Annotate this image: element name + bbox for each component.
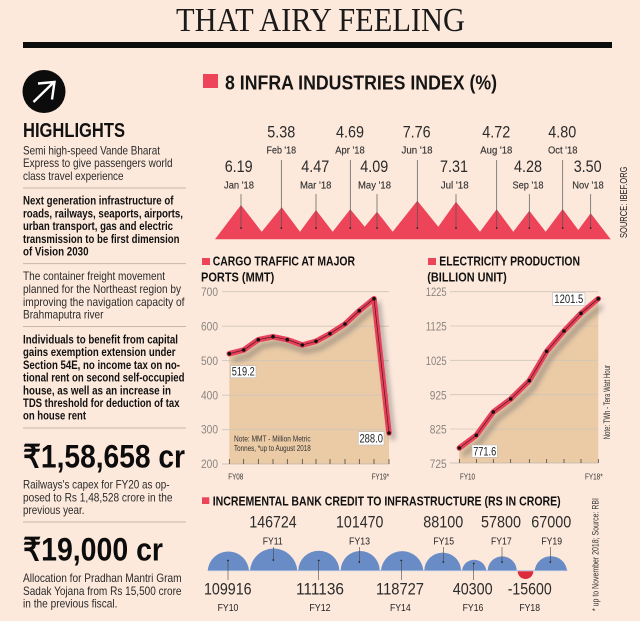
upper values: 67000 — [531, 513, 571, 531]
line shadow — [463, 306, 602, 455]
upper values: 57800 — [481, 513, 521, 531]
y axis labels: 725 — [430, 457, 447, 471]
values: 7.31 — [440, 158, 468, 176]
data points — [228, 297, 391, 435]
upper values: 88100 — [423, 513, 463, 531]
month labels: May '18 — [358, 180, 391, 192]
chart note — [234, 434, 311, 453]
text block: capital gains — [23, 332, 184, 423]
lower values: 40300 — [453, 580, 493, 598]
text block: Vision 2030: roads, railways, seaports, airports, — [23, 206, 183, 220]
text block: capital gains: TDS threshold for deduction of tax — [23, 396, 180, 410]
heading: cargo traffic: PORTS (MMT) — [201, 270, 274, 285]
y axis labels: 300 — [201, 423, 218, 437]
grid lines — [222, 292, 389, 464]
chart: triangles — [215, 201, 611, 239]
y axis labels: 700 — [201, 285, 218, 299]
values: 4.47 — [301, 158, 329, 176]
area fill — [459, 299, 598, 463]
values: 4.28 — [514, 158, 542, 176]
value label 771.6: 771.6 — [473, 446, 496, 458]
text block: capital gains: Individuals to benefit from capital — [23, 332, 178, 346]
lower year labels — [218, 602, 540, 614]
text block: container freight — [23, 269, 185, 322]
heading: electricity: (BILLION UNIT) — [427, 270, 507, 285]
source note: SOURCE: IBEF.ORG — [618, 166, 630, 238]
title: THAT AIRY FEELING — [176, 2, 465, 39]
text block: capital gains: Section 54E, no income tax on no- — [23, 358, 180, 372]
value label 288.0: 288.0 — [359, 433, 383, 445]
heading: bank credit: INCREMENTAL BANK CREDIT TO INFRASTRUCTURE (RS IN CRORE) — [213, 495, 561, 509]
text block: Vision 2030: Next generation infrastructure of — [23, 194, 174, 208]
data points — [458, 297, 600, 450]
panel: cargo traffic chart — [201, 254, 393, 481]
month labels: Jan '18 — [224, 180, 254, 192]
values: 4.69 — [336, 123, 364, 141]
text block: container freight: improving the navigation capacity of — [23, 295, 185, 309]
lower values: 111136 — [296, 580, 344, 598]
y axis labels: 500 — [201, 354, 218, 368]
icon: arrow in circle — [22, 70, 66, 113]
y axis labels: 200 — [201, 457, 218, 471]
text block: Vande Bharat — [23, 143, 172, 183]
lower values: 109916 — [204, 580, 252, 598]
y axis labels: 1025 — [426, 354, 447, 368]
y axis labels: 400 — [201, 389, 218, 403]
text block: Vande Bharat: Express to give passengers world — [23, 156, 172, 170]
upper year labels: FY15 — [433, 535, 454, 547]
text block: Vande Bharat: Semi high-speed Vande Bharat — [23, 143, 161, 157]
heading: infra index: 8 INFRA INDUSTRIES INDEX (%) — [225, 72, 497, 94]
heading: cargo traffic: CARGO TRAFFIC AT MAJOR — [213, 254, 355, 269]
values: 4.80 — [548, 123, 576, 141]
text block: railways capex: Railways's capex for FY20 as op- — [23, 477, 170, 491]
month labels: Feb '18 — [267, 144, 296, 156]
chart: semicircles — [208, 549, 567, 571]
y axis labels: 1125 — [426, 319, 447, 333]
text block: container freight: The container freight movement — [23, 269, 166, 283]
month labels: Sep '18 — [512, 180, 544, 192]
line shadow — [233, 305, 393, 440]
x axis labels: FY19* — [372, 471, 390, 481]
x axis labels — [460, 471, 603, 481]
text block: railways capex: previous year. — [23, 503, 84, 517]
text block: gram sadak: in the previous fiscal. — [23, 596, 118, 610]
lower values: -15600 — [508, 580, 552, 598]
upper values — [249, 513, 571, 531]
y axis labels: 1225 — [426, 285, 447, 299]
upper year labels — [263, 535, 562, 547]
text block: capital gains: tional rent on second self-occupied — [23, 371, 184, 385]
text block: Vision 2030: urban transport, gas and electric — [23, 219, 173, 233]
values: 3.50 — [574, 158, 602, 176]
month labels: Mar '18 — [300, 180, 332, 192]
chart note: Note: MMT - Million Metric — [234, 434, 311, 444]
upper year labels: FY19 — [541, 535, 562, 547]
lower values: 118727 — [376, 580, 424, 598]
y axis labels — [201, 285, 218, 471]
month labels: Nov '18 — [572, 180, 604, 192]
y axis labels: 925 — [430, 389, 447, 403]
values: 4.09 — [360, 158, 388, 176]
text block: capital gains: on house rent — [23, 409, 86, 423]
text block: gram sadak — [23, 571, 182, 610]
stems — [241, 160, 591, 228]
panel: incremental bank credit — [202, 495, 601, 614]
note: TWh: Note: TWh - Tera Watt Hour — [602, 365, 612, 439]
month labels — [224, 144, 604, 192]
text block: Vision 2030: of Vision 2030 — [23, 244, 89, 258]
text block: gram sadak: Allocation for Pradhan Mantri Gram — [23, 571, 182, 585]
text block: Vision 2030: transmission to be first dimension — [23, 232, 180, 246]
heading: electricity: ELECTRICITY PRODUCTION — [439, 254, 580, 269]
stems — [228, 547, 550, 580]
lower year labels: FY14 — [390, 602, 411, 614]
upper year labels: FY11 — [263, 535, 283, 547]
x axis labels: FY18* — [585, 471, 603, 481]
month labels: Aug '18 — [480, 144, 512, 156]
upper year labels: FY13 — [349, 535, 370, 547]
chart note: Tonnes, *up to August 2018 — [234, 443, 311, 453]
negative arc FY18 — [518, 571, 533, 579]
values: 5.38 — [267, 123, 295, 141]
title — [23, 2, 612, 48]
heading: electricity — [427, 254, 580, 285]
x axis labels: FY08 — [228, 471, 243, 481]
x axis labels: FY10 — [460, 471, 475, 481]
text block: gram sadak: Sadak Yojana from Rs 15,500 crore — [23, 584, 182, 598]
text block: container freight: Brahmaputra river — [23, 308, 104, 322]
month labels: Jun '18 — [402, 144, 433, 156]
month labels: Jul '18 — [441, 180, 469, 192]
month labels: Oct '18 — [548, 144, 578, 156]
upper values: 146724 — [249, 513, 297, 531]
upper values: 101470 — [336, 513, 383, 531]
area fill — [229, 299, 389, 464]
heading: cargo traffic — [201, 254, 355, 285]
grid lines — [450, 292, 598, 463]
heading: highlights: HIGHLIGHTS — [23, 119, 125, 142]
values: 7.76 — [403, 123, 431, 141]
line — [459, 299, 598, 448]
lower year labels: FY10 — [218, 602, 238, 614]
value label 1201.5: 1201.5 — [554, 294, 583, 306]
lower year labels: FY16 — [463, 602, 483, 614]
text block: Vande Bharat: class travel experience — [23, 169, 124, 183]
lower values — [204, 580, 552, 598]
source note: RBI: * up to November 2018; Source: RBI — [590, 498, 601, 611]
lower year labels: FY12 — [309, 602, 331, 614]
baseline — [208, 569, 568, 572]
upper year labels: FY17 — [491, 535, 512, 547]
lower year labels: FY18 — [519, 602, 540, 614]
ticks — [229, 459, 389, 464]
panel: electricity production chart — [426, 254, 612, 481]
text block: container freight: planned for the Northeast region by — [23, 282, 181, 296]
text block: railways capex — [23, 477, 173, 517]
big number: railways capex: ₹1,58,658 cr — [23, 438, 185, 474]
values: 6.19 — [225, 158, 253, 176]
text block: capital gains: house, as well as an increase in — [23, 383, 171, 397]
y axis labels: 825 — [430, 422, 447, 436]
text block: capital gains: gains exemption extension under — [23, 345, 176, 359]
ticks — [459, 459, 598, 463]
x axis labels — [228, 471, 390, 481]
month labels: Apr '18 — [335, 144, 365, 156]
panel: 8 infra industries index — [203, 72, 630, 239]
values: 4.72 — [482, 123, 510, 141]
line — [229, 299, 389, 433]
big number: gram sadak: ₹19,000 cr — [23, 532, 163, 568]
text block: Vision 2030 — [23, 194, 183, 258]
y axis labels: 600 — [201, 319, 218, 333]
y axis labels — [426, 285, 447, 471]
values — [225, 123, 602, 176]
panel: highlights sidebar — [22, 70, 186, 610]
text block: railways capex: posed to Rs 1,48,528 crore in the — [23, 490, 173, 504]
value label 519.2: 519.2 — [232, 367, 255, 379]
